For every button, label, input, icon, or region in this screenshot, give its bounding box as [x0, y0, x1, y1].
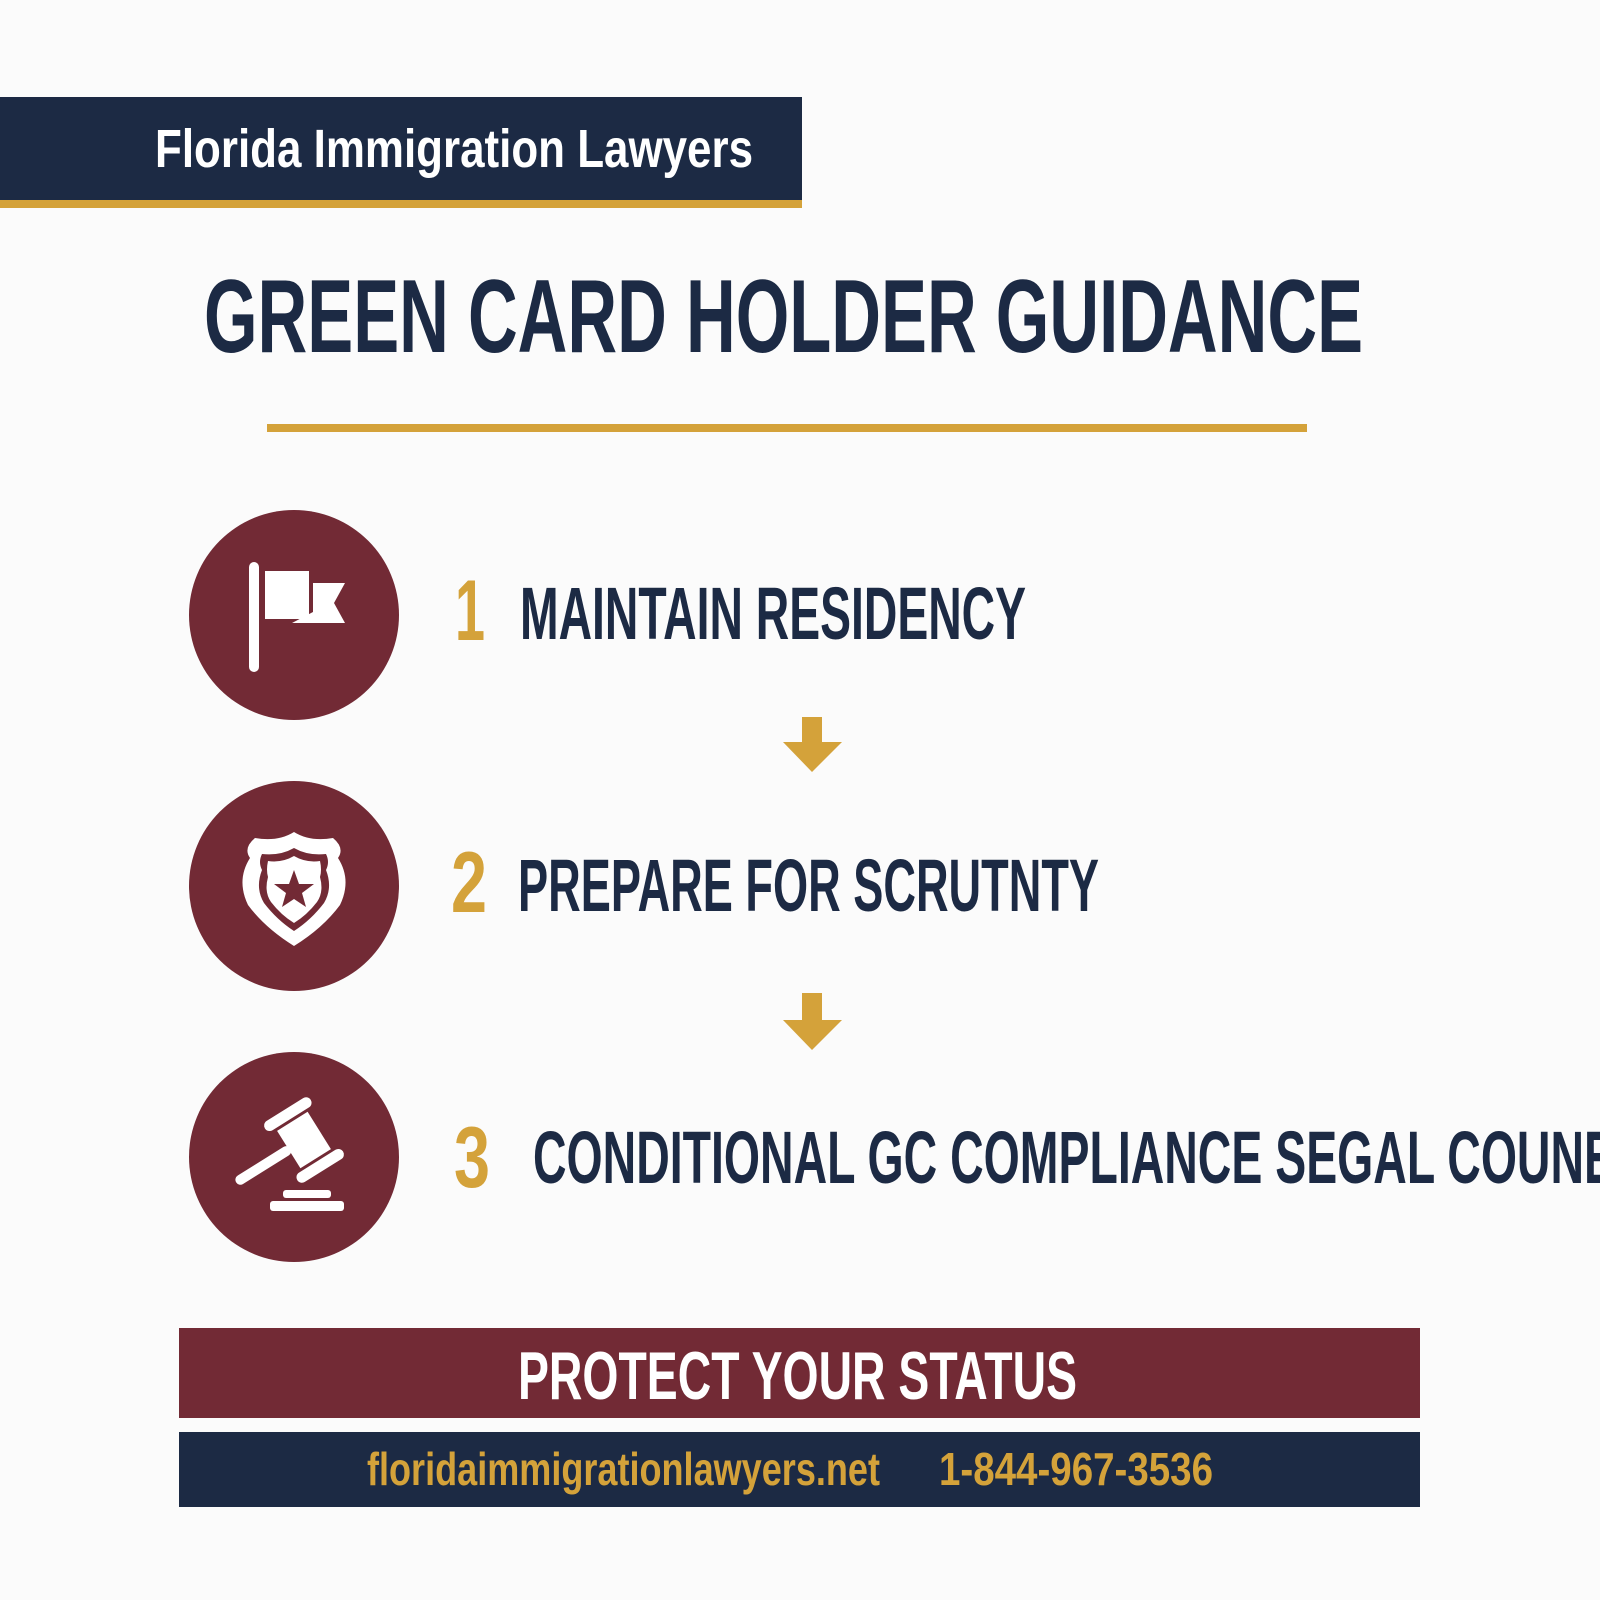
step 1: MAINTAIN RESIDENCY: [520, 572, 1026, 655]
header banner: [0, 97, 802, 208]
contact bar: [179, 1432, 1420, 1507]
icon: shield badge: [189, 781, 399, 991]
contact bar: floridaimmigrationlawyers.net: [367, 1443, 880, 1495]
icon: gavel: [189, 1052, 399, 1262]
step 2: PREPARE FOR SCRUTNTY: [518, 844, 1099, 927]
step 2: [189, 781, 1099, 991]
contact bar: 1-844-967-3536: [939, 1443, 1213, 1495]
arrow 1: [783, 717, 842, 772]
step 2: 2: [451, 835, 487, 931]
icon: flag: [189, 510, 399, 720]
step 1: [189, 510, 1026, 720]
banner: protect your status: [179, 1328, 1420, 1418]
arrow 2: [783, 993, 842, 1050]
step 3: 3: [454, 1110, 490, 1206]
header banner: Florida Immigration Lawyers: [155, 119, 753, 179]
banner: protect your status: PROTECT YOUR STATUS: [518, 1338, 1077, 1414]
gold rule under title: [267, 424, 1307, 432]
step 3: [189, 1052, 1600, 1262]
step 1: 1: [455, 563, 485, 659]
